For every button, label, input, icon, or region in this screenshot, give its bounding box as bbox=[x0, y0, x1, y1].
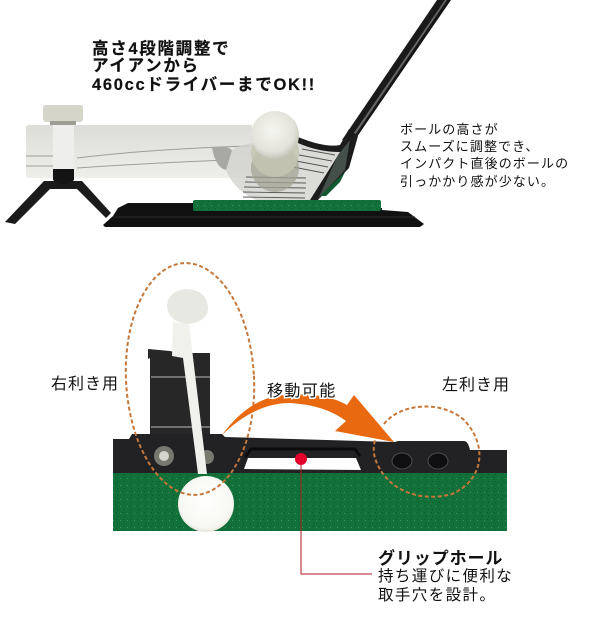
text block: grip hole: グリップホール bbox=[378, 548, 503, 568]
grip hole bbox=[244, 458, 361, 470]
club face bbox=[224, 143, 342, 201]
text block: grip hole: 取手穴を設計。 bbox=[378, 586, 496, 604]
heading: height adjustment: 高さ4段階調整で bbox=[92, 38, 230, 58]
panel: close-up photo bbox=[113, 289, 507, 532]
text block: grip hole: 持ち運びに便利な bbox=[378, 567, 513, 585]
screws bbox=[154, 446, 174, 466]
tee cap and post bbox=[43, 105, 83, 122]
illustration: golf club bbox=[212, 0, 451, 202]
heading: height adjustment: アイアンから bbox=[92, 56, 200, 75]
text block: ball height description: ボールの高さが bbox=[400, 122, 499, 137]
mounting holes bbox=[392, 453, 412, 469]
heading: height adjustment: 460ccドライバーまでOK!! bbox=[92, 75, 316, 94]
shaft bbox=[343, 0, 451, 147]
text block: ball height description: スムーズに調整でき、 bbox=[400, 139, 539, 154]
callout: right-hand dashed ellipse bbox=[120, 260, 260, 498]
white tee arm bbox=[172, 322, 207, 474]
text block: ball height description bbox=[400, 122, 569, 189]
label: movable: 移動可能 bbox=[267, 382, 337, 400]
tee cap bbox=[167, 289, 208, 324]
arm bbox=[26, 125, 252, 178]
text block: ball height description: インパクト直後のボールの bbox=[400, 156, 569, 171]
text block: ball height description: 引っかかり感が少ない。 bbox=[400, 174, 555, 189]
callout: left-hand dashed circle bbox=[374, 407, 479, 497]
illustration: base mat bbox=[103, 200, 424, 227]
arrow: movable direction bbox=[222, 394, 394, 442]
label: left-handed: 左利き用 bbox=[442, 376, 510, 394]
black bracket bbox=[148, 349, 210, 434]
artificial turf bbox=[113, 473, 507, 531]
text block: grip hole bbox=[378, 548, 513, 604]
hosel bbox=[298, 129, 358, 202]
illustration: tee arm and stand side view bbox=[5, 105, 252, 224]
base plate bbox=[113, 434, 507, 478]
heading: height adjustment bbox=[92, 38, 316, 94]
leader line: grip hole bbox=[295, 453, 372, 574]
label: right-handed: 右利き用 bbox=[51, 375, 119, 393]
white golf ball bbox=[178, 476, 234, 532]
illustration: golf balls at stepped heights bbox=[251, 111, 299, 192]
stand legs bbox=[5, 181, 111, 224]
